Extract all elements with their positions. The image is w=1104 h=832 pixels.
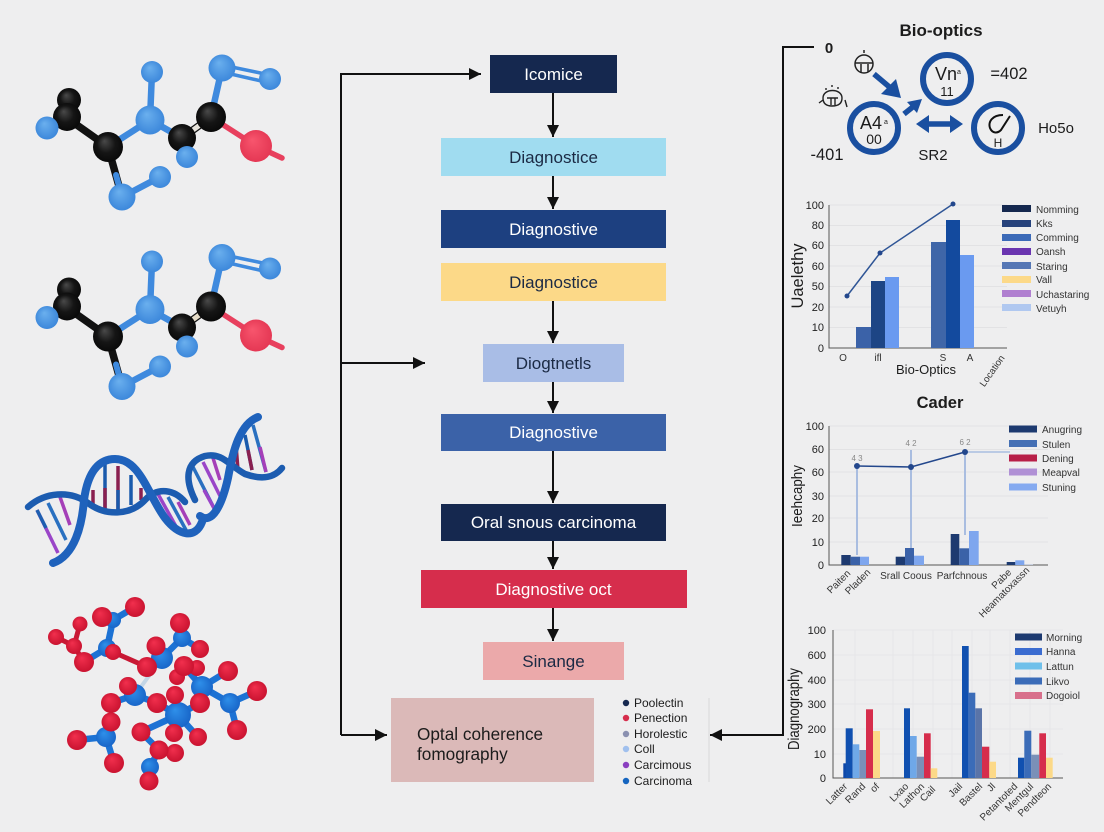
- chart 3: Diagnography bars: 400: [808, 675, 826, 687]
- chart 3: Diagnography bars: 0: [820, 773, 826, 785]
- chart 3: Diagnography bars: Lxao: [888, 781, 911, 804]
- step: Oral snous carcinoma: [441, 504, 666, 541]
- chart 2 legend: Anugring: [1042, 425, 1082, 436]
- chart 1: Bio-Optics bars: 20: [812, 302, 824, 314]
- chart 2: Cader bars and line: Srall Coous: [880, 571, 932, 582]
- chart 3: Diagnography bars: Latter: [824, 781, 851, 807]
- chart 1: Bio-Optics bars: [789, 200, 1007, 389]
- chart 2: Cader bars and line: Ieehcaphy: [790, 464, 806, 527]
- chart 2: Cader bars and line: Paiten: [825, 568, 853, 596]
- chart 2 legend: Meapval: [1042, 468, 1080, 479]
- chart 1: Bio-Optics bars: Bio-Optics: [896, 362, 956, 377]
- chart 1 legend: Staring: [1036, 262, 1068, 273]
- bio-optics diagram: a: [957, 69, 961, 76]
- chart 3 legend: Morning: [1046, 633, 1082, 644]
- chart 2: Cader bars and line: Heamatoxassn: [977, 565, 1032, 620]
- chart 3: Diagnography bars: 600: [808, 650, 826, 662]
- molecule cluster: [48, 597, 267, 790]
- chart 1: Bio-Optics bars: 10: [812, 322, 824, 334]
- chart 3: Diagnography bars: 200: [808, 724, 826, 736]
- chart 3 legend: Lattun: [1046, 662, 1074, 673]
- step: Diagnostive navy: [441, 210, 666, 248]
- bio-optics diagram: A4: [860, 113, 882, 133]
- bio-optics diagram: 11: [940, 84, 954, 99]
- chart 2: Cader bars and line: Pabe: [990, 567, 1014, 592]
- bio-optics diagram: Vn: [935, 64, 957, 84]
- step: Diagnostive oct: Diagnostive oct: [495, 580, 612, 599]
- chart 1 legend: Kks: [1036, 219, 1053, 230]
- chart 3: Diagnography bars: Mentgul: [1003, 781, 1036, 814]
- chart 2: Cader bars and line: 4 3: [851, 454, 863, 463]
- label: =402: =402: [990, 65, 1028, 83]
- chart 1 legend: Oansh: [1036, 247, 1065, 258]
- chart 1: Bio-Optics bars: O: [839, 353, 847, 364]
- chart 3: Diagnography bars: Bastel: [958, 781, 985, 809]
- dot legend: Coll: [634, 742, 655, 756]
- chart 3: Diagnography bars: [786, 625, 1063, 823]
- step: Optical coherence tomography: Optal coherence: [417, 724, 543, 744]
- chart 1: Bio-Optics bars: 60: [812, 240, 824, 252]
- chart 3: Diagnography bars: 10: [814, 749, 826, 761]
- bio-optics diagram: 00: [866, 131, 882, 147]
- label: -401: -401: [810, 146, 844, 164]
- label: 0: 0: [825, 40, 833, 57]
- chart 2 legend: Stuning: [1042, 483, 1076, 494]
- chart 3: Diagnography bars: 300: [808, 699, 826, 711]
- chart 3: Diagnography bars: Diagnography: [786, 668, 803, 750]
- chart 3 legend: Hanna: [1046, 647, 1076, 658]
- chart 1: Bio-Optics bars: Uaelethy: [789, 243, 807, 308]
- chart 2: Cader bars and line: 100: [806, 421, 824, 433]
- chart 1: Bio-Optics bars: A: [967, 353, 974, 364]
- chart 2: Cader bars and line: 20: [812, 513, 824, 525]
- chart 3: Diagnography bars: Jl: [985, 781, 998, 794]
- chart 1 legend: Comming: [1036, 233, 1079, 244]
- chart 3: Diagnography bars: Pendteon: [1016, 781, 1054, 819]
- step: Diagnostive navy: Diagnostive: [509, 220, 598, 239]
- step: Diagnostive blue: Diagnostive: [509, 423, 598, 442]
- dot legend: Penection: [634, 711, 687, 725]
- step: Icomice: Icomice: [524, 65, 583, 84]
- bio-optics diagram: [819, 50, 1022, 152]
- chart 2: Cader bars and line: 0: [818, 560, 824, 572]
- step: Oral snous carcinoma: Oral snous carcinoma: [471, 513, 637, 532]
- chart 1 legend: [1002, 205, 1089, 315]
- step: Diagnostive oct: [421, 570, 687, 608]
- molecule 1: [36, 54, 282, 210]
- dot legend: Poolectin: [634, 696, 683, 710]
- chart 2: Cader bars and line: 10: [812, 537, 824, 549]
- chart 2: Cader bars and line: 60: [812, 467, 824, 479]
- chart 1: Bio-Optics bars: 80: [812, 220, 824, 232]
- step: Optical coherence tomography: fomography: [417, 744, 508, 764]
- chart 2 legend: Stulen: [1042, 440, 1070, 451]
- chart 1 legend: Nomming: [1036, 205, 1079, 216]
- chart 3: Diagnography bars: Jail: [947, 781, 965, 800]
- chart 1: Bio-Optics bars: 0: [818, 343, 824, 355]
- chart 1: Bio-Optics bars: Location: [978, 353, 1007, 389]
- step: Diogtnetls: [483, 344, 624, 382]
- step: Diagnostice light blue: [441, 138, 666, 176]
- label: Ho5o: Ho5o: [1038, 120, 1074, 137]
- chart 3 legend: Likvo: [1046, 677, 1070, 688]
- chart 2: Cader bars and line: 60: [812, 444, 824, 456]
- step: Diagnostice yellow: [441, 263, 666, 301]
- chart 1: Bio-Optics bars: 50: [812, 281, 824, 293]
- bio-optics diagram: a: [884, 119, 888, 126]
- chart 3: Diagnography bars: Cail: [918, 784, 938, 804]
- chart 2 legend: Dening: [1042, 454, 1074, 465]
- chart 3 legend: [1015, 633, 1082, 702]
- step: Diagnostive blue: [441, 414, 666, 451]
- chart 2: Cader bars and line: Parfchnous: [937, 571, 987, 582]
- chart 1 legend: Vall: [1036, 275, 1052, 286]
- chart 2: Cader bars and line: Pladen: [843, 567, 873, 597]
- molecule 2: [36, 244, 282, 400]
- chart 3: Diagnography bars: of: [868, 781, 882, 795]
- bio-optics diagram: H: [994, 136, 1002, 150]
- step: Diagnostice yellow: Diagnostice: [509, 273, 598, 292]
- chart 2: Cader bars and line: [790, 421, 1048, 620]
- chart 1: Bio-Optics bars: 60: [812, 261, 824, 273]
- chart 1: Bio-Optics bars: 100: [806, 200, 824, 212]
- right connector arrow: [710, 47, 814, 735]
- chart 3: Diagnography bars: Lathon: [898, 781, 927, 811]
- chart 3: Diagnography bars: 100: [808, 625, 826, 637]
- chart 3: Diagnography bars: Rand: [843, 781, 868, 806]
- step: Sinange: [483, 642, 624, 680]
- chart 1: Bio-Optics bars: ifl: [874, 353, 882, 364]
- title: Bio-optics: Bio-optics: [899, 21, 983, 40]
- flow arrows: [552, 93, 554, 641]
- dot legend: Horolestic: [634, 727, 687, 741]
- chart 1 legend: Vetuyh: [1036, 304, 1067, 315]
- chart 1 legend: Uchastaring: [1036, 290, 1089, 301]
- chart 1: Bio-Optics bars: S: [940, 353, 947, 364]
- dot legend: Carcinoma: [634, 774, 692, 788]
- chart 2 legend: [1009, 425, 1082, 494]
- DNA helix: [28, 417, 282, 563]
- step: Sinange: Sinange: [522, 652, 585, 671]
- step: Icomice: [490, 55, 617, 93]
- dot legend: [623, 696, 709, 788]
- chart 2: Cader bars and line: 4 2: [905, 439, 917, 448]
- step: Optical coherence tomography: [391, 698, 594, 782]
- chart 3: Diagnography bars: Petantoted: [978, 781, 1020, 823]
- chart 2: Cader bars and line: 6 2: [959, 438, 971, 447]
- dot legend: Carcimous: [634, 758, 691, 772]
- step: Diagnostice light blue: Diagnostice: [509, 148, 598, 167]
- chart 3 legend: Dogoiol: [1046, 691, 1080, 702]
- left connector arrows: [341, 74, 481, 735]
- label: SR2: SR2: [918, 147, 948, 164]
- title: Cader: Cader: [917, 394, 964, 412]
- step: Diogtnetls: Diogtnetls: [516, 354, 591, 373]
- chart 2: Cader bars and line: 30: [812, 491, 824, 503]
